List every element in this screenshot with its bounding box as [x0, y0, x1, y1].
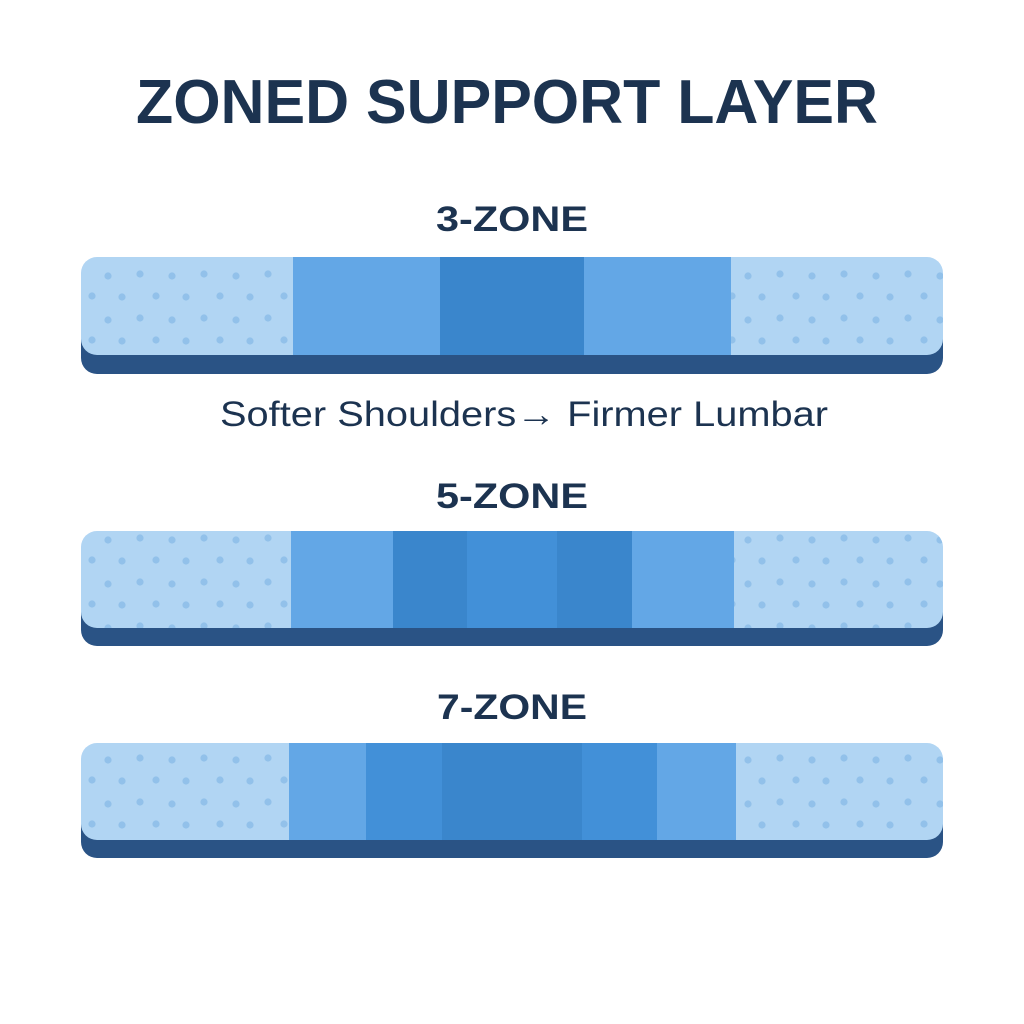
bar: 5-zone	[81, 531, 943, 646]
caption: Softer Shoulders→ Firmer Lumbar	[220, 395, 828, 434]
title: ZONED SUPPORT LAYER	[136, 68, 878, 137]
heading: 7-zone: 7-ZONE	[437, 688, 587, 727]
heading: 5-zone: 5-ZONE	[436, 477, 588, 516]
heading: 3-zone: 3-ZONE	[436, 200, 588, 239]
bar: 7-zone	[81, 743, 943, 858]
bar: 3-zone	[81, 257, 943, 374]
